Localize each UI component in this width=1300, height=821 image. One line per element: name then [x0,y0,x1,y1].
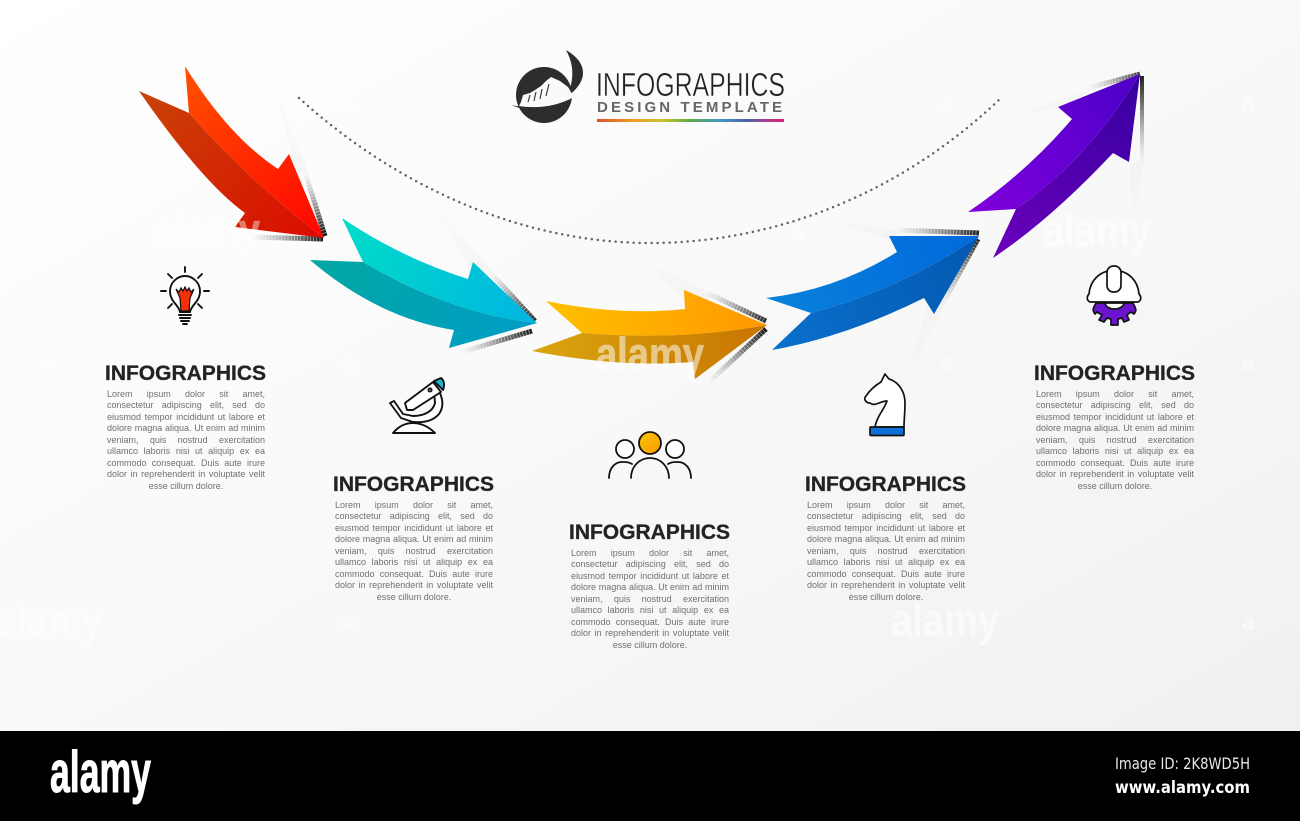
text block 2: veniam, quis nostrud exercitation [335,546,493,556]
icon: helmet with gear [1087,266,1141,325]
text block 1: INFOGRAPHICS [105,362,266,385]
text block 4: INFOGRAPHICS [805,473,966,496]
footer logo: alamy [50,740,151,805]
icon: people [609,432,691,478]
text block 1: esse cillum dolore. [149,481,223,491]
text block 2: commodo consequat. Duis aute irure [335,569,493,579]
watermark: a [342,90,355,115]
arrow 1: red [139,66,325,239]
arrow 4: blue [766,230,979,350]
text block 5: eiusmod tempor incididunt ut labore et [1036,412,1194,422]
logo title: INFOGRAPHICS [596,66,785,103]
text block 1: dolor in reprehenderit in voluptate velit [107,469,265,479]
text block 1: dolore magna aliqua. Ut enim ad minim [107,423,265,433]
text block 2 [333,473,494,602]
text block 4: esse cillum dolore. [849,592,923,602]
text block 1: commodo consequat. Duis aute irure [107,458,265,468]
watermark: alamy [1043,204,1151,256]
watermark: a [941,90,954,115]
text block 1: eiusmod tempor incididunt ut labore et [107,412,265,422]
text block 5: ullamco laboris nisi ut aliquip ex ea [1036,446,1194,456]
text block 4: dolor in reprehenderit in voluptate velit [807,580,965,590]
text block 2: esse cillum dolore. [377,592,451,602]
text block 1: Lorem ipsum dolor sit amet, [107,388,265,398]
text block 4: commodo consequat. Duis aute irure [807,569,965,579]
text block 5: Lorem ipsum dolor sit amet, [1036,388,1194,398]
faint motion streaks behind arrows [272,80,1144,392]
watermark: a [1242,610,1255,635]
text block 2: Lorem ipsum dolor sit amet, [335,500,493,510]
arrow 5: purple [968,74,1142,258]
logo mark [512,50,583,123]
watermark: alamy [152,204,260,256]
text block 4: dolore magna aliqua. Ut enim ad minim [807,534,965,544]
text block 5: dolor in reprehenderit in voluptate velit [1036,469,1194,479]
text block 3: veniam, quis nostrud exercitation [571,594,729,604]
text block 5: dolore magna aliqua. Ut enim ad minim [1036,423,1194,433]
rainbow bar [597,119,784,122]
text block 3: ullamco laboris nisi ut aliquip ex ea [571,605,729,615]
text block 3: dolor in reprehenderit in voluptate velit [571,628,729,638]
text block 5: veniam, quis nostrud exercitation [1036,435,1194,445]
arrow 2: teal [310,218,537,352]
text block 3: consectetur adipiscing elit, sed do [571,559,729,569]
text block 5: commodo consequat. Duis aute irure [1036,458,1194,468]
website: www.alamy.com [1115,778,1250,798]
text block 4: ullamco laboris nisi ut aliquip ex ea [807,557,965,567]
text block 4: consectetur adipiscing elit, sed do [807,511,965,521]
text block 5: consectetur adipiscing elit, sed do [1036,400,1194,410]
icon: microscope [390,378,444,433]
text block 2: INFOGRAPHICS [333,473,494,496]
text block 1: consectetur adipiscing elit, sed do [107,400,265,410]
dotted curve [299,98,1001,243]
text block 4: veniam, quis nostrud exercitation [807,546,965,556]
text block 3 [569,521,730,650]
text block 2: dolore magna aliqua. Ut enim ad minim [335,534,493,544]
text block 4: eiusmod tempor incididunt ut labore et [807,523,965,533]
text block 1: ullamco laboris nisi ut aliquip ex ea [107,446,265,456]
watermark: a [342,350,355,375]
text block 3: eiusmod tempor incididunt ut labore et [571,571,729,581]
text block 3: esse cillum dolore. [613,640,687,650]
text block 2: eiusmod tempor incididunt ut labore et [335,523,493,533]
text block 3: dolore magna aliqua. Ut enim ad minim [571,582,729,592]
arrow 3: orange [532,290,767,383]
watermark: alamy [891,594,999,646]
watermark: a [791,220,804,245]
text block 1 [105,362,266,491]
text block 4 [805,473,966,602]
watermark: a [342,610,355,635]
icon: light bulb [161,267,209,324]
text block 5 [1034,362,1195,491]
text block 1: veniam, quis nostrud exercitation [107,435,265,445]
text block 3: INFOGRAPHICS [569,521,730,544]
watermark [0,90,1255,646]
image id: Image ID: 2K8WD5H [1115,754,1250,773]
watermark: a [1242,90,1255,115]
text block 2: dolor in reprehenderit in voluptate velit [335,580,493,590]
text block 3: commodo consequat. Duis aute irure [571,617,729,627]
text block 5: esse cillum dolore. [1078,481,1152,491]
watermark: a [41,350,54,375]
text block 2: ullamco laboris nisi ut aliquip ex ea [335,557,493,567]
text block 2: consectetur adipiscing elit, sed do [335,511,493,521]
text block 3: Lorem ipsum dolor sit amet, [571,548,729,558]
logo [512,50,785,123]
watermark: a [1242,350,1255,375]
icon: chess knight [865,374,905,436]
logo subtitle: DESIGN TEMPLATE [597,99,782,116]
watermark: alamy [596,328,704,380]
watermark: a [941,350,954,375]
text block 4: Lorem ipsum dolor sit amet, [807,500,965,510]
footer bar [0,731,1300,821]
text block 5: INFOGRAPHICS [1034,362,1195,385]
